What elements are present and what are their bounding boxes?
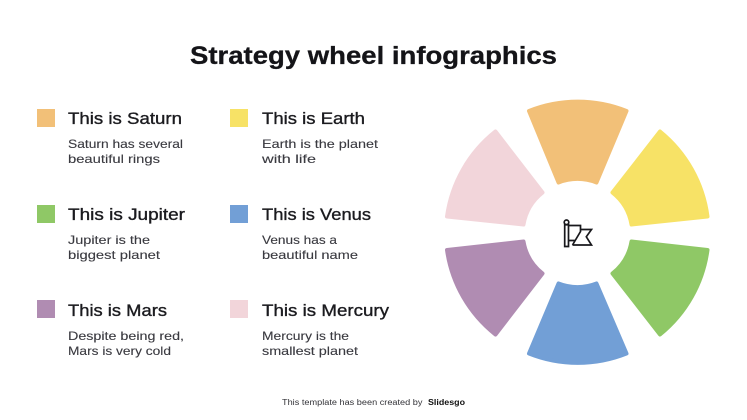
- title: Strategy wheel infographics: [190, 42, 557, 70]
- legend item: Venus: beautiful name: [262, 248, 358, 262]
- legend item: Jupiter: biggest planet: [68, 248, 161, 262]
- wheel segment: Mars: [447, 242, 542, 334]
- legend item: Earth: This is Earth: [262, 110, 365, 128]
- wheel segment: Venus: [529, 284, 626, 363]
- strategy wheel: [447, 102, 708, 363]
- wheel segment: Mercury: [447, 132, 542, 224]
- wheel segment: Saturn: [529, 102, 626, 182]
- legend item: Mercury: smallest planet: [262, 344, 359, 358]
- legend item: Mercury: This is Mercury: [262, 302, 390, 320]
- legend item: Saturn: This is Saturn: [68, 110, 182, 128]
- legend item: Saturn: beautiful rings: [68, 152, 160, 166]
- footer credit: Slidesgo: [428, 398, 465, 407]
- legend item: Jupiter: [37, 205, 186, 262]
- wheel segment: Jupiter: [612, 242, 708, 334]
- legend item: Earth: [230, 109, 379, 166]
- wheel segment: Earth: [612, 132, 708, 224]
- legend item: Venus: [230, 205, 371, 262]
- legend item: Venus: This is Venus: [262, 206, 371, 224]
- legend item: Mars: [37, 300, 184, 358]
- legend item: Jupiter: This is Jupiter: [68, 206, 186, 224]
- legend item: Mercury: [230, 300, 390, 358]
- legend item: Saturn: Saturn has several: [68, 137, 183, 151]
- legend item: Venus: Venus has a: [262, 233, 337, 247]
- legend item: Mars: Despite being red,: [68, 329, 184, 343]
- legend item: Earth: Earth is the planet: [262, 137, 379, 151]
- icon: flag: [564, 220, 592, 246]
- legend item: Saturn: [37, 109, 183, 166]
- legend item: Mars: This is Mars: [68, 302, 167, 320]
- legend item: Mercury: Mercury is the: [262, 329, 349, 343]
- legend item: Jupiter: Jupiter is the: [68, 233, 150, 247]
- legend item: Earth: with life: [261, 152, 316, 166]
- legend item: Mars: Mars is very cold: [68, 344, 171, 358]
- footer credit: This template has been created by: [282, 398, 425, 407]
